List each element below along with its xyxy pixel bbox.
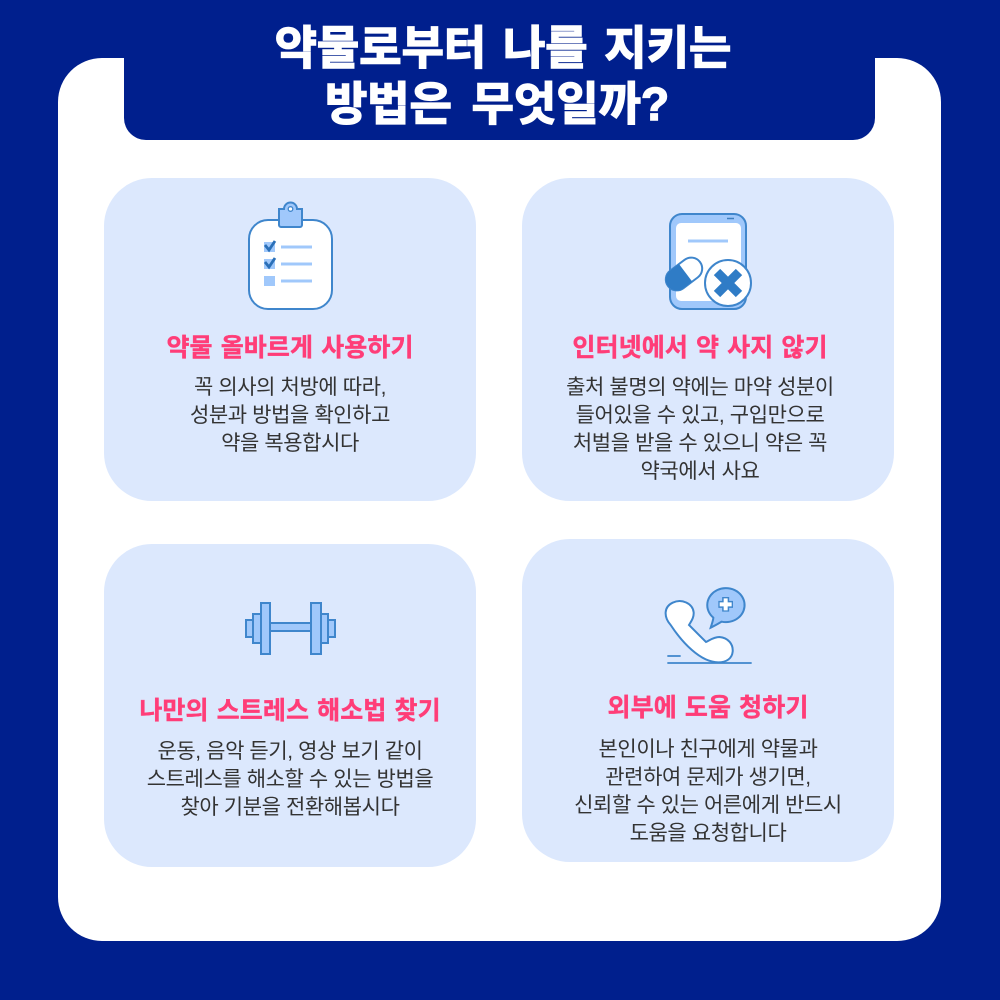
body text: 들어있을 수 있고, 구입만으로 <box>576 404 824 427</box>
panel: do not buy online <box>522 178 894 501</box>
body text: 신뢰할 수 있는 어른에게 반드시 <box>574 794 842 817</box>
body text: 도움을 요청합니다 <box>630 822 786 845</box>
icon: dumbbell <box>245 602 336 655</box>
panel: find your stress relief <box>104 544 476 867</box>
panel: ask for outside help <box>522 539 894 862</box>
body text: 꼭 의사의 처방에 따라, <box>194 376 386 399</box>
body text <box>574 738 842 845</box>
body text: 약을 복용합시다 <box>221 432 359 455</box>
heading: 인터넷에서 약 사지 않기 <box>572 334 828 362</box>
body text: 스트레스를 해소할 수 있는 방법을 <box>147 768 433 791</box>
white sheet <box>58 58 941 941</box>
panel: use medication properly <box>104 178 476 501</box>
title: 방법은 무엇일까? <box>325 78 669 130</box>
title: 약물로부터 나를 지키는 <box>275 22 731 74</box>
body text: 출처 불명의 약에는 마약 성분이 <box>566 376 834 399</box>
body text <box>566 376 834 483</box>
icon: clipboard checklist <box>248 202 333 310</box>
body text: 운동, 음악 듣기, 영상 보기 같이 <box>157 740 423 763</box>
title banner <box>124 0 875 140</box>
body text: 성분과 방법을 확인하고 <box>190 404 390 427</box>
icon: tablet with pill and X <box>664 213 752 310</box>
body text <box>147 740 433 819</box>
title <box>275 22 731 130</box>
body text: 본인이나 친구에게 약물과 <box>598 738 818 761</box>
body text <box>190 376 390 455</box>
body text: 찾아 기분을 전환해봅시다 <box>180 796 400 819</box>
body text: 처벌을 받을 수 있으니 약은 꼭 <box>573 432 827 455</box>
heading: 외부에 도움 청하기 <box>608 694 808 722</box>
body text: 약국에서 사요 <box>641 460 759 483</box>
heading: 나만의 스트레스 해소법 찾기 <box>139 697 441 725</box>
body text: 관련하여 문제가 생기면, <box>605 766 811 789</box>
icon: phone with medical bubble <box>664 587 752 664</box>
heading: 약물 올바르게 사용하기 <box>166 334 414 362</box>
